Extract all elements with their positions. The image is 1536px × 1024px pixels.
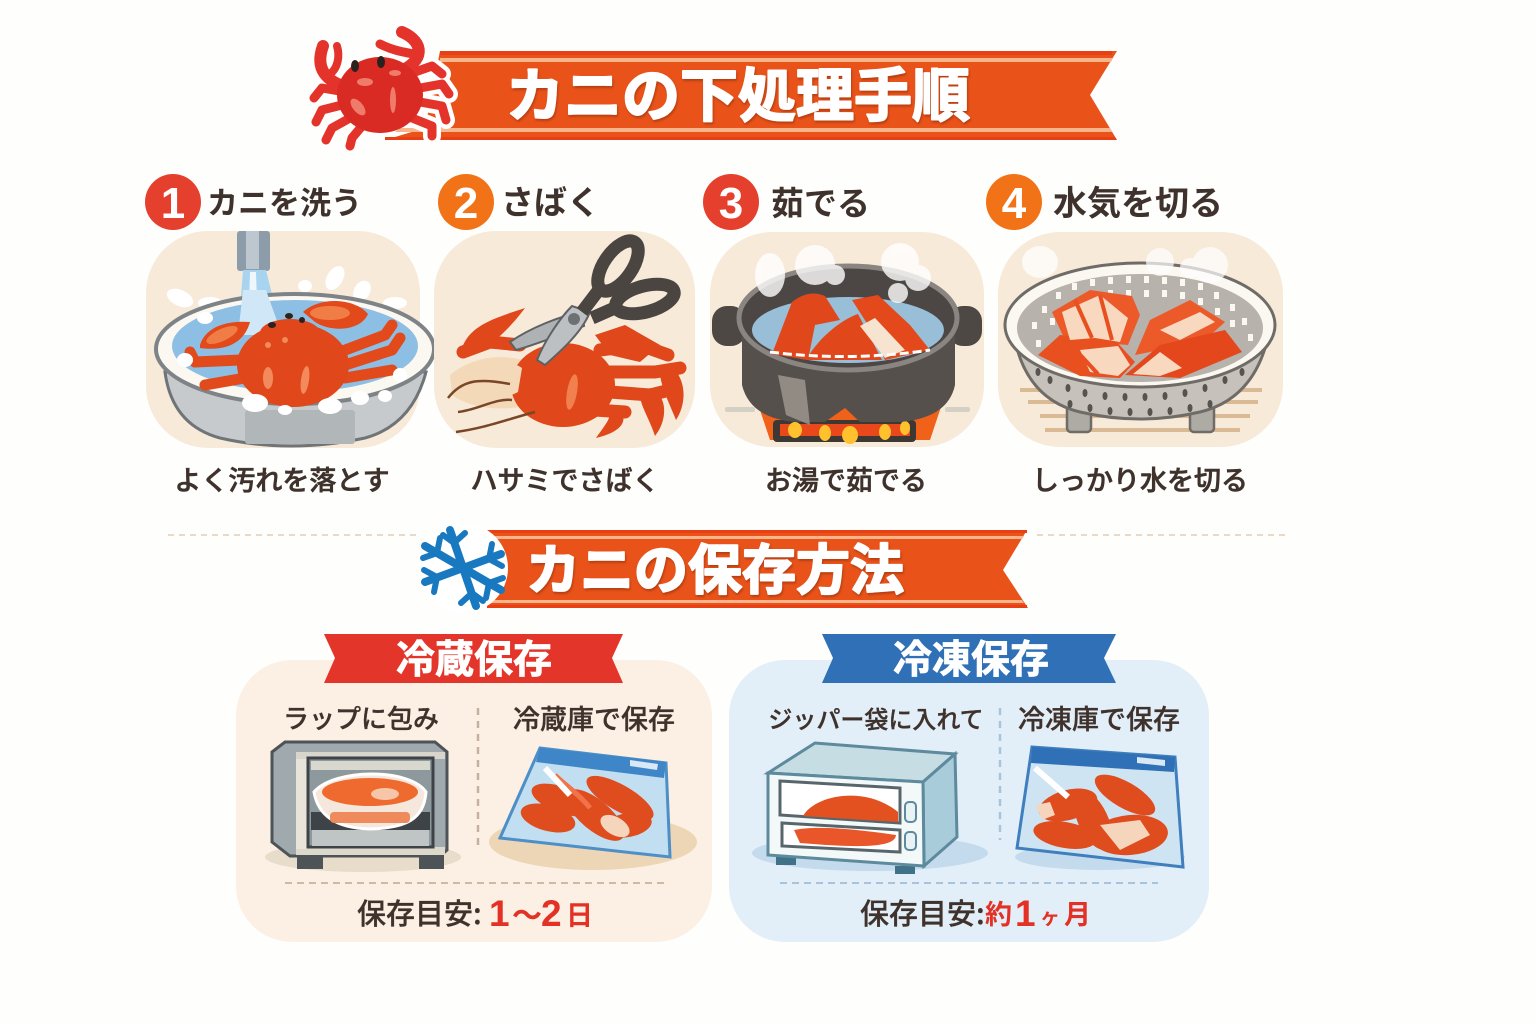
bottom label: frozen duration: 保存目安: [860, 891, 985, 933]
title banner [385, 49, 1117, 140]
bottom label: frozen duration: 1 [1015, 893, 1036, 934]
divider: frozen vertical [999, 708, 1001, 840]
step 4 heading: 水気を切る [1053, 176, 1223, 225]
bottom label: frozen duration: 月 [1064, 893, 1091, 932]
panel: frozen storage [729, 629, 1209, 942]
step 3 heading: 3 [719, 179, 743, 228]
caption: step 1: よく汚れを落とす [174, 459, 390, 498]
divider: refrigerated vertical [477, 708, 479, 851]
step 4 heading [986, 174, 1223, 230]
step 1 heading [145, 174, 362, 230]
step 1 heading: カニを洗う [207, 178, 362, 223]
ribbon: frozen [822, 629, 1116, 685]
step 3 heading: 茹でる [771, 177, 870, 225]
bottom label: refrigerated duration: 〜 [512, 891, 542, 935]
panel: boiling in a pot [710, 232, 984, 447]
bottom label: frozen duration [860, 891, 1091, 934]
step 2 heading: さばく [501, 176, 600, 224]
panel: cutting the crab with scissors [434, 231, 695, 448]
storage banner [487, 526, 1028, 608]
ribbon: refrigerated: 冷蔵保存 [396, 629, 552, 685]
step 3 heading [703, 174, 870, 230]
panel: washing the crab in a bowl [146, 231, 434, 448]
panel: draining in a colander [998, 232, 1283, 447]
label: refrigerator: 冷蔵庫で保存 [513, 698, 675, 737]
title text: カニの下処理手順 [506, 49, 970, 133]
icon: zipper bag refrigerator [489, 748, 697, 870]
icon: crab [314, 32, 449, 146]
label: freezer: 冷凍庫で保存 [1018, 698, 1180, 737]
section divider right [1037, 534, 1285, 536]
bottom label: refrigerated duration: 2 [541, 893, 562, 934]
step 4 heading: 4 [1002, 179, 1027, 228]
icon: snowflake [418, 523, 508, 613]
label: wrap: ラップに包み [283, 699, 439, 736]
ribbon: frozen: 冷凍保存 [893, 629, 1049, 685]
bottom label: frozen duration: ヶ [1040, 901, 1060, 930]
label: zipper bag: ジッパー袋に入れて [768, 700, 984, 735]
step 1 heading: 1 [161, 179, 185, 228]
bottom label: refrigerated duration: 1 [489, 893, 510, 934]
caption: step 4: しっかり水を切る [1032, 459, 1248, 498]
icon: microwave with container [265, 742, 461, 872]
step 2 heading: 2 [454, 179, 478, 228]
step 2 heading [438, 174, 600, 230]
panel: refrigerated storage [236, 629, 712, 942]
caption: step 3: お湯で茹でる [765, 459, 927, 498]
divider: refrigerated horizontal [285, 882, 668, 884]
icon: zipper bag freezer [1015, 747, 1185, 870]
icon: toaster oven [752, 743, 988, 874]
bottom label: frozen duration: 約 [985, 893, 1012, 932]
storage title text: カニの保存方法 [526, 526, 904, 605]
section divider left [168, 534, 420, 536]
bottom label: refrigerated duration: 保存目安: [357, 891, 482, 933]
caption: step 2: ハサミでさばく [470, 459, 660, 498]
bottom label: refrigerated duration [357, 891, 593, 935]
ribbon: refrigerated [324, 629, 623, 685]
divider: frozen horizontal [780, 882, 1158, 884]
bottom label: refrigerated duration: 日 [566, 894, 593, 933]
